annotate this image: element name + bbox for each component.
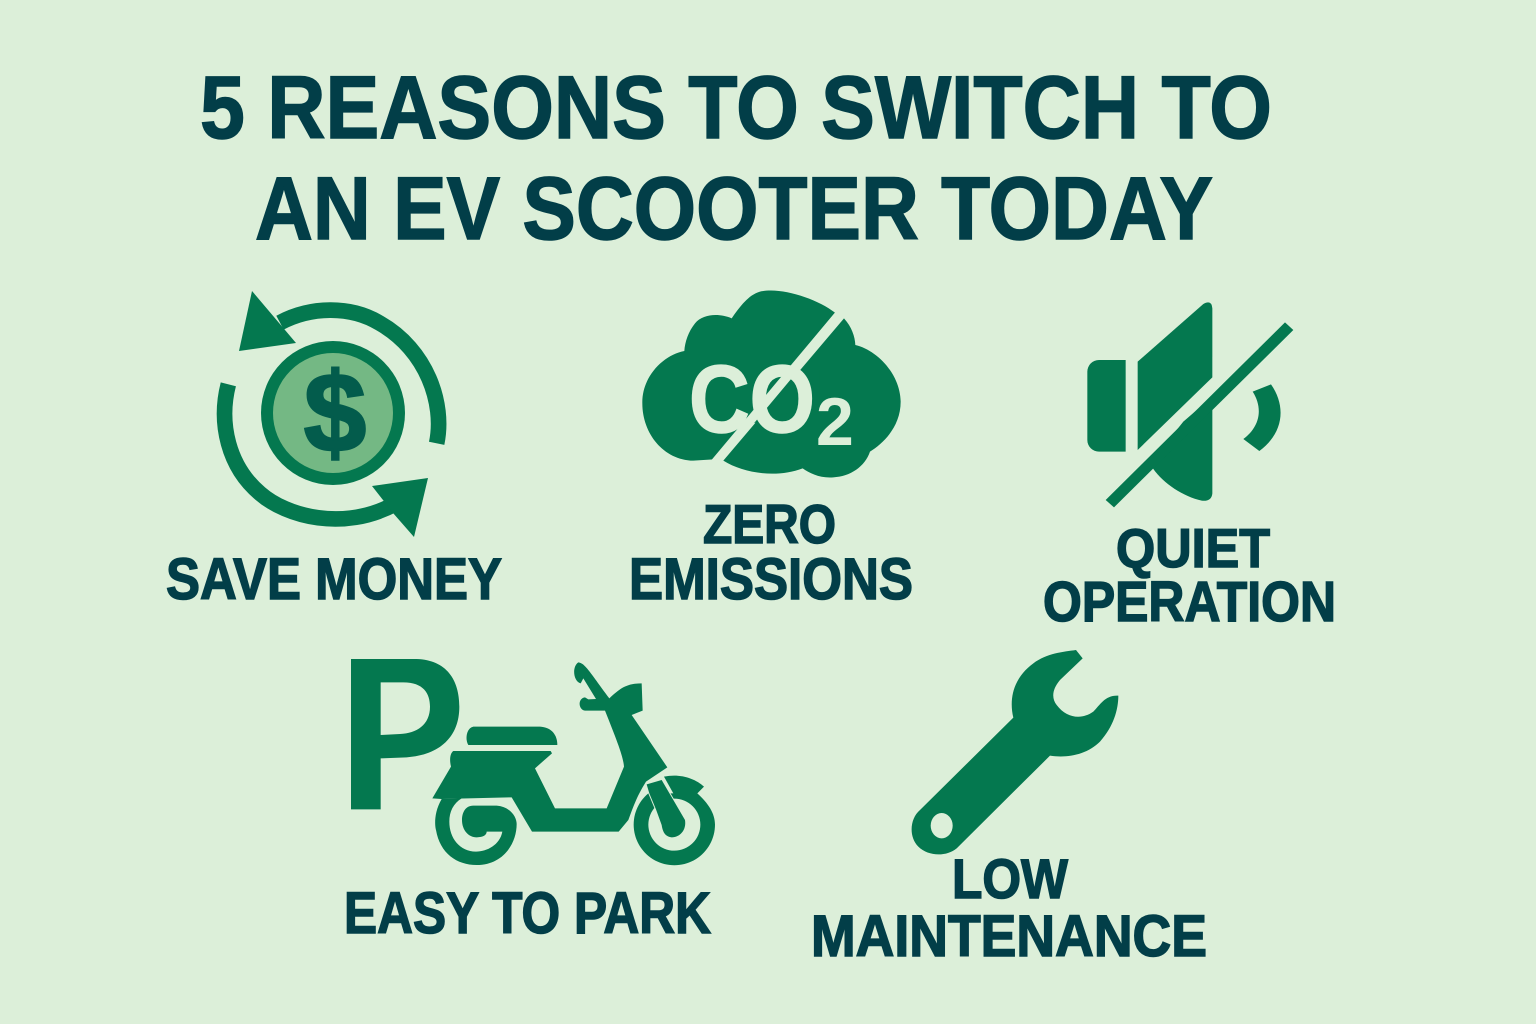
icon: muted speaker: [1087, 302, 1293, 507]
panel: quiet operation: [1043, 302, 1336, 634]
label: quiet operation: [1043, 517, 1336, 634]
title: 5 REASONS TO SWITCH TO: [200, 57, 1272, 157]
label: zero emissions: EMISSIONS: [629, 547, 913, 612]
label: quiet operation: OPERATION: [1043, 570, 1336, 634]
label: zero emissions: ZERO: [703, 493, 836, 555]
icon: crossed-out CO2 cloud: [642, 290, 901, 477]
title: [200, 57, 1272, 258]
icon: crossed-out CO2 cloud: CO: [689, 346, 815, 453]
label: save money: SAVE MONEY: [166, 547, 502, 612]
label: easy to park: EASY TO PARK: [344, 881, 711, 946]
panel: easy to park: [344, 659, 715, 946]
label: low maintenance: [811, 847, 1207, 969]
icon: coin with circular arrows: $: [304, 350, 366, 475]
title: AN EV SCOOTER TODAY: [255, 158, 1213, 258]
panel: save money: [166, 291, 502, 612]
icon: wrench: [912, 650, 1118, 854]
icon: parking P and scooter: [351, 659, 715, 865]
label: low maintenance: LOW: [952, 847, 1068, 910]
label: low maintenance: MAINTENANCE: [811, 904, 1207, 969]
label: quiet operation: QUIET: [1116, 517, 1270, 579]
label: zero emissions: [629, 493, 913, 612]
panel: low maintenance: [811, 650, 1207, 969]
icon: crossed-out CO2 cloud: 2: [816, 384, 854, 460]
panel: zero emissions: [629, 290, 913, 612]
icon: coin with circular arrows: [225, 291, 439, 537]
